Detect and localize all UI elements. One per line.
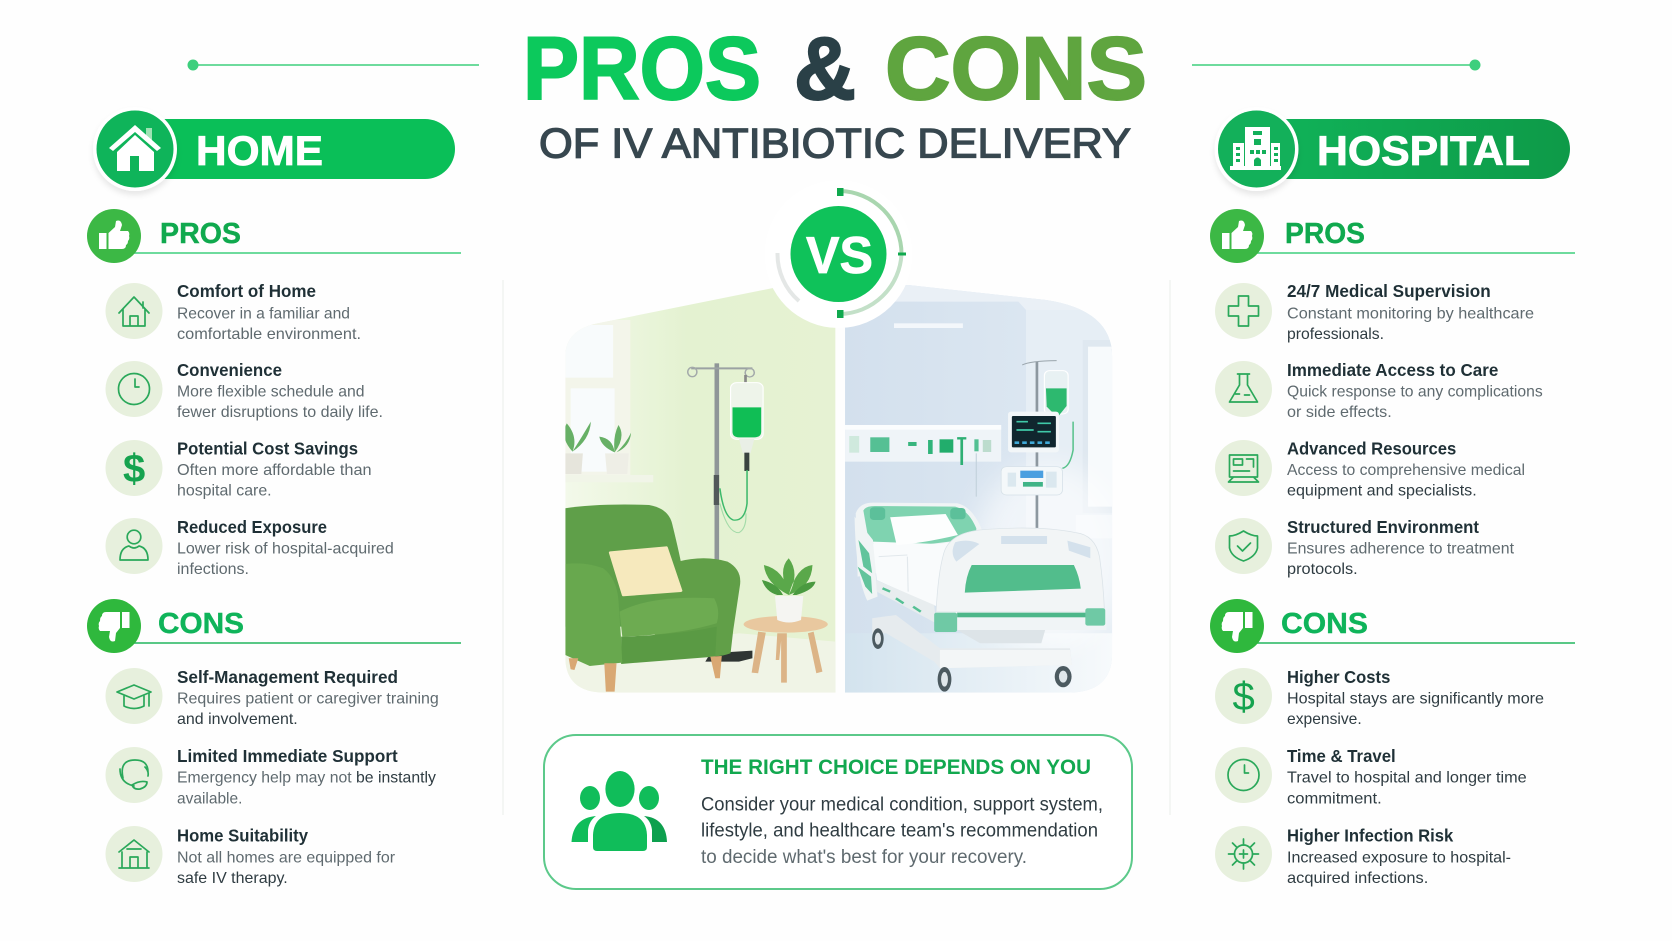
item: Higher Infection Risk: acquired infections. [1287,870,1428,887]
item: Comfort of Home: Comfort of Home [177,281,316,301]
item: Structured Environment: protocols. [1287,561,1358,578]
home pros heading: PROS [160,218,241,250]
item: Home Suitability: Home Suitability [177,826,308,846]
item: Structured Environment [1215,517,1515,578]
item: Limited Immediate Support: Limited Immediate Support [177,746,398,766]
item: Immediate Access to Care [1215,360,1543,421]
item: Convenience: fewer disruptions to daily life. [177,404,383,421]
icon: dollar [106,440,162,496]
callout: the right choice: lifestyle, and healthcare team's recommendation [701,820,1098,842]
panel: home [87,107,461,887]
item: Reduced Exposure [106,517,394,578]
icon: flask [1215,361,1272,417]
hospital bed [856,503,982,577]
item: Advanced Resources: Advanced Resources [1287,438,1457,458]
hospital pros heading [1210,209,1575,263]
item: Potential Cost Savings [106,438,372,500]
illustration: hospital room [845,283,1126,693]
item: Potential Cost Savings: hospital care. [177,482,272,500]
item: Potential Cost Savings: Often more affordable than [177,462,372,479]
icon: monitor [1215,440,1272,496]
decorative header line: left [188,60,479,70]
item: Advanced Resources: equipment and specialists. [1287,482,1477,500]
icon: house [106,283,162,339]
item: 24/7 Medical Supervision: professionals. [1287,326,1384,343]
home cons heading [87,599,461,653]
item: Higher Infection Risk: Higher Infection Risk [1287,826,1454,846]
item: Reduced Exposure: Lower risk of hospital-acquired [177,540,394,558]
item: Home Suitability: Not all homes are equipped for [177,850,396,866]
icon: shield [1215,518,1272,574]
item: Comfort of Home: Recover in a familiar and [177,306,350,322]
callout: the right choice: THE RIGHT CHOICE DEPENDS ON YOU [701,755,1091,779]
item: Time & Travel: commitment. [1287,790,1382,808]
illustration: home room [564,287,835,693]
item: Structured Environment: Structured Environment [1287,517,1479,537]
icon: dollar: $ [1232,675,1255,719]
item: Higher Costs: expensive. [1287,711,1362,728]
item: Potential Cost Savings: Potential Cost Savings [177,438,358,458]
home banner: HOME [196,127,323,174]
item: Immediate Access to Care: or side effects. [1287,404,1392,421]
item: Home Suitability [106,826,396,887]
callout: the right choice: Consider your medical condition, support system, [701,794,1103,816]
item: Advanced Resources: Access to comprehensive medical [1287,462,1525,479]
icon: person [106,518,162,574]
item: Immediate Access to Care: Immediate Access to Care [1287,360,1499,380]
item: Higher Infection Risk [1215,826,1511,887]
icon: dollar: $ [123,447,145,491]
item: 24/7 Medical Supervision: 24/7 Medical Supervision [1287,281,1491,301]
item: Higher Infection Risk: Increased exposure to hospital- [1287,850,1511,866]
icon: dollar [1215,668,1272,724]
item: Time & Travel: Travel to hospital and longer time [1287,770,1527,786]
callout: the right choice: to decide what's best for your recovery. [701,847,1027,868]
item: Convenience: More flexible schedule and [177,384,364,400]
item: Immediate Access to Care: Quick response to any complications [1287,384,1543,400]
icon: clock [1215,747,1272,803]
item: Higher Costs [1215,667,1544,728]
item: Reduced Exposure: Reduced Exposure [177,517,327,537]
item: Limited Immediate Support: available. [177,790,242,808]
hospital pros heading: PROS [1285,218,1365,250]
item: Reduced Exposure: infections. [177,561,249,578]
item: Self-Management Required: Requires patient or caregiver training [177,690,439,708]
hospital cons heading: CONS [1281,608,1368,640]
icon: clock [106,361,162,417]
home cons heading: CONS [158,608,244,640]
icon: house with door [106,826,162,882]
VS badge [764,180,912,328]
item: Higher Costs: Higher Costs [1287,667,1391,687]
item: Time & Travel: Time & Travel [1287,746,1396,766]
home pros heading [87,209,461,263]
item: 24/7 Medical Supervision [1215,281,1534,343]
item: Higher Costs: Hospital stays are significantly more [1287,690,1544,708]
icon: medical cross [1215,283,1272,339]
title: CONS [885,18,1147,118]
callout: the right choice [544,735,1132,889]
panel: hospital [1210,107,1575,887]
decorative header line: right [1192,60,1480,70]
item: Limited Immediate Support: Emergency help may not be instantly [177,770,436,786]
item: Home Suitability: safe IV therapy. [177,870,288,887]
item: Convenience [106,360,383,421]
item: Advanced Resources [1215,438,1525,500]
item: Comfort of Home [106,281,361,343]
item: 24/7 Medical Supervision: Constant monitoring by healthcare [1287,306,1534,322]
hospital banner: HOSPITAL [1317,127,1530,174]
chair [565,505,681,627]
VS badge: VS [806,227,873,285]
item: Comfort of Home: comfortable environment. [177,326,361,343]
title: & [794,18,856,118]
hospital cons heading [1210,599,1575,653]
item: Structured Environment: Ensures adherence to treatment [1287,540,1515,558]
title: PROS [523,18,761,118]
hospital banner [1214,107,1570,191]
subtitle: OF IV ANTIBIOTIC DELIVERY [539,120,1131,166]
icon: graduation cap [106,668,162,724]
item: Self-Management Required [106,667,439,728]
item: Self-Management Required: and involvement. [177,711,298,728]
item: Self-Management Required: Self-Management Required [177,667,398,687]
comparison illustration [564,180,1126,693]
icon: headset [106,747,162,803]
item: Limited Immediate Support [106,746,436,808]
icon: people group [572,771,667,851]
icon: virus [1215,826,1272,882]
title [523,18,1147,118]
home banner [93,107,455,191]
item: Convenience: Convenience [177,360,282,380]
item: Time & Travel [1215,746,1527,808]
